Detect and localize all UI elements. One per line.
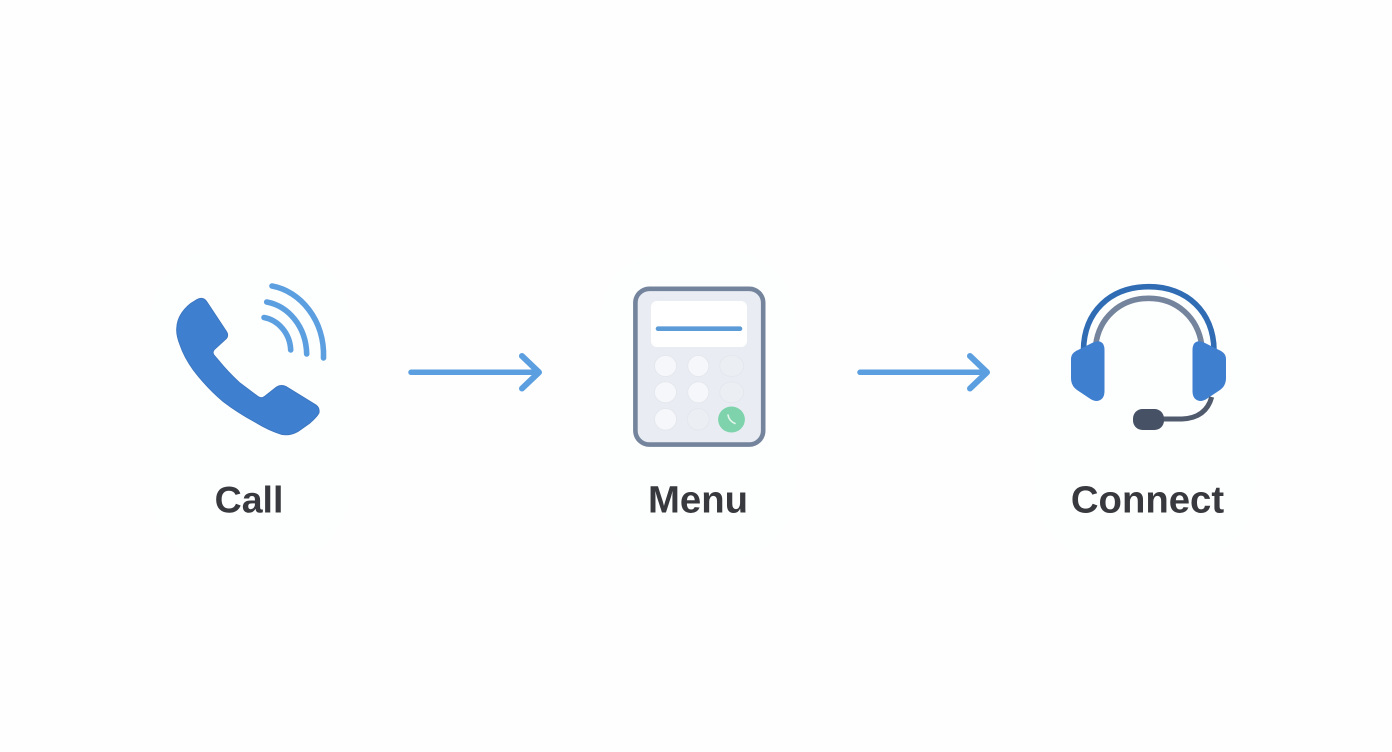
keypad screen — [651, 301, 747, 347]
step: call — [177, 286, 324, 520]
icon: phone handset — [177, 298, 319, 435]
label: Connect: Connect — [1071, 478, 1224, 522]
small phone glyph — [728, 415, 735, 424]
left ear cup — [1071, 341, 1104, 401]
arrow: call to menu — [411, 356, 539, 388]
step: menu — [635, 289, 763, 522]
label: Menu: Menu — [648, 478, 748, 522]
icon: keypad — [635, 289, 763, 445]
microphone — [1133, 409, 1164, 430]
icon: signal waves — [264, 286, 324, 358]
inner headband — [1096, 298, 1202, 345]
green call button — [718, 406, 745, 432]
screen line — [658, 326, 740, 331]
outer headband — [1084, 287, 1214, 350]
microphone boom — [1160, 397, 1212, 419]
keypad buttons — [654, 356, 744, 430]
step: connect — [1071, 287, 1226, 522]
icon: headset — [1071, 287, 1226, 430]
arrow: menu to connect — [860, 356, 987, 388]
right ear cup — [1192, 341, 1226, 401]
label: Call: Call — [215, 478, 283, 520]
